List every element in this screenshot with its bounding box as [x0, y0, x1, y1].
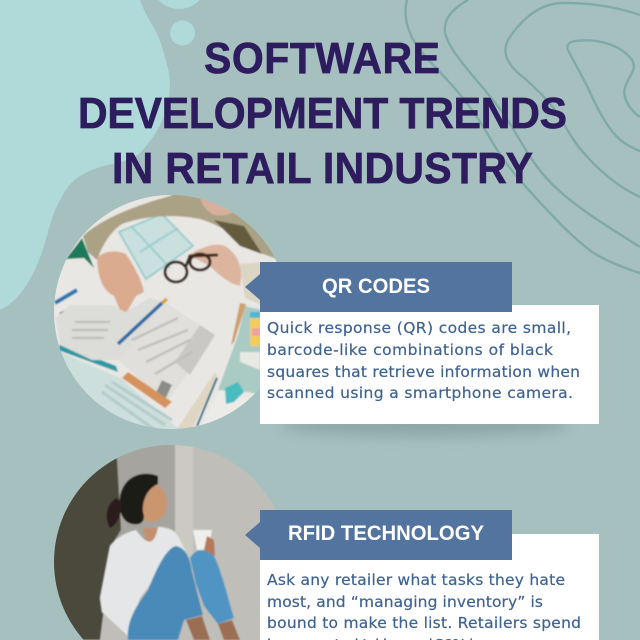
- card shadow: [280, 415, 570, 437]
- description text: [267, 319, 580, 402]
- description text: squares that retrieve information when: [267, 363, 580, 381]
- description text: scanned using a smartphone camera.: [267, 384, 573, 402]
- panel: RFID technology: [245, 510, 599, 640]
- background blob: [0, 0, 170, 310]
- title: [78, 34, 567, 192]
- small circle decoration: [170, 20, 195, 46]
- top circle decoration: [152, 0, 206, 9]
- heading banner: [245, 510, 512, 560]
- title: IN RETAIL INDUSTRY: [112, 144, 533, 192]
- heading: RFID TECHNOLOGY: [288, 522, 484, 545]
- description text: Quick response (QR) codes are small,: [267, 319, 571, 337]
- description box: [260, 305, 599, 424]
- title: DEVELOPMENT TRENDS: [78, 89, 567, 137]
- description text: bound to make the list. Retailers spend: [267, 614, 581, 632]
- description text: most, and “managing inventory” is: [267, 593, 543, 611]
- description text: barcode-like combinations of black: [267, 341, 553, 359]
- description box: [260, 534, 599, 640]
- contour lines: [406, 0, 640, 273]
- heading: QR CODES: [322, 275, 430, 298]
- photo: woman sitting with coffee: [54, 445, 276, 640]
- description text: Ask any retailer what tasks they hate: [267, 571, 565, 589]
- panel: QR codes: [245, 262, 599, 424]
- description text: [267, 571, 581, 640]
- title: SOFTWARE: [204, 34, 440, 82]
- photo: open book on desk: [54, 195, 277, 429]
- heading banner: [245, 262, 512, 312]
